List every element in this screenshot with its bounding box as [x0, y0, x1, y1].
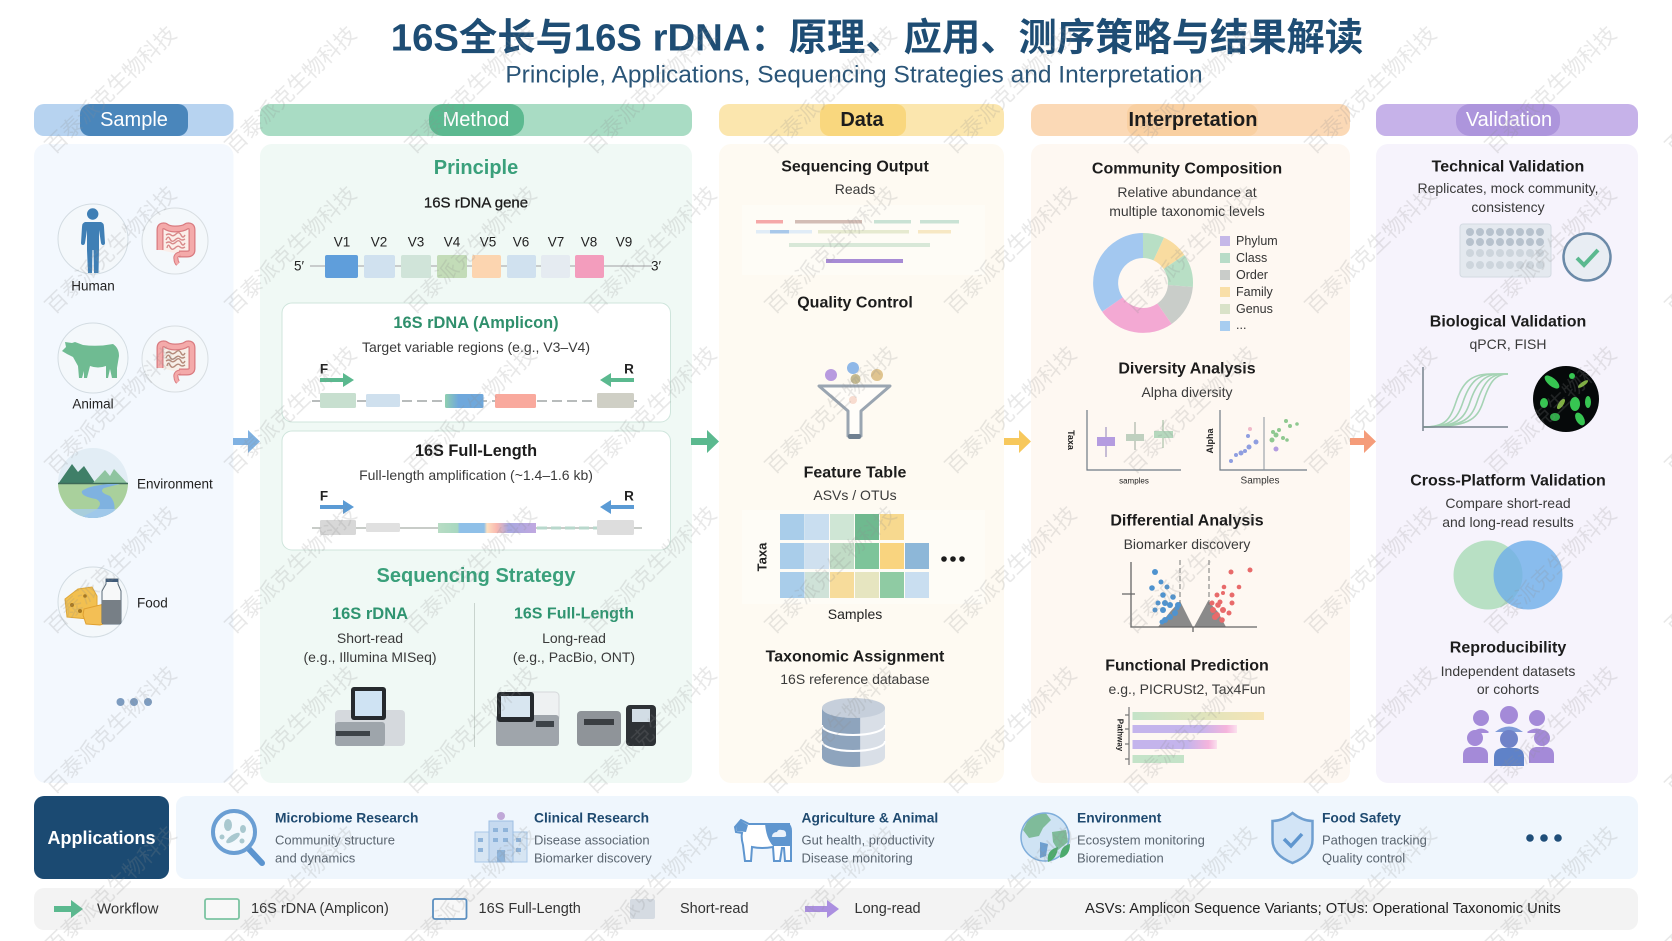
panel: Method: [260, 144, 692, 783]
text: clinical research: Disease association: [534, 832, 650, 848]
gene diagram: V2: [371, 234, 387, 250]
arrow: data to interpretation: [1003, 430, 1031, 453]
text: short-read strategy: [303, 605, 437, 665]
icon: cow: [735, 820, 791, 861]
bar chart: [1116, 707, 1264, 765]
gene diagram: 5′: [294, 258, 304, 274]
text: differential analysis: [1110, 512, 1264, 552]
watermark: 百泰派克生物科技: [1477, 498, 1623, 640]
legend: abbreviations: ASVs: Amplicon Sequence Variants; OTUs: Operational Taxonomic Units: [1085, 901, 1561, 917]
card: 16S rDNA amplicon: R: [624, 362, 634, 376]
header: Interpretation: Interpretation: [1129, 109, 1257, 131]
venn diagram: [1454, 540, 1562, 610]
text: sequencing output: Reads: [835, 181, 875, 197]
icon: animal: [58, 323, 128, 393]
watermark: 百泰派克生物科技: [1477, 18, 1623, 160]
heading: Sequencing Strategy: Sequencing Strategy: [377, 565, 576, 587]
heatmap: Taxa: [754, 542, 770, 571]
icon: funnel: [819, 362, 890, 439]
icon: human gut: [142, 208, 208, 274]
gene diagram: V4: [444, 234, 461, 250]
text: feature table: ASVs / OTUs: [813, 487, 897, 503]
label: Environment: Environment: [137, 476, 213, 492]
icon: people: [1463, 706, 1554, 766]
header: Data: [719, 104, 1004, 136]
donut chart: [1106, 246, 1181, 320]
header: Validation: [1376, 104, 1638, 136]
header: Sample: Sample: [100, 109, 168, 131]
watermark: 百泰派克生物科技: [217, 18, 363, 160]
watermark: 百泰派克生物科技: [397, 338, 543, 480]
legend: full-length: [433, 899, 581, 919]
icon: human: [58, 204, 128, 274]
watermark: 百泰派克生物科技: [1117, 658, 1263, 800]
text: long-read strategy: [513, 606, 635, 665]
card: 16S rDNA amplicon: [282, 303, 670, 422]
legend: amplicon: [205, 899, 389, 919]
donut legend: Family: [1236, 285, 1274, 299]
legend: [34, 888, 1638, 930]
more applications dots: [1526, 834, 1562, 842]
panel: Data: [719, 144, 1004, 783]
gene diagram: V5: [480, 234, 496, 250]
watermark: 百泰派克生物科技: [757, 498, 903, 640]
watermark: 百泰派克生物科技: [1297, 498, 1443, 640]
label: Food: Food: [137, 596, 168, 610]
gene diagram: V1: [334, 234, 350, 250]
icon: short-read sequencer: [335, 687, 405, 746]
watermark: 百泰派克生物科技: [1297, 18, 1443, 160]
arrow: method to data: [691, 430, 719, 453]
watermark: 百泰派克生物科技: [577, 658, 723, 800]
legend: short-read: [630, 899, 749, 919]
text: cross-platform validation: Cross-Platform Validation: [1410, 472, 1606, 490]
watermark: 百泰派克生物科技: [937, 498, 1083, 640]
watermark: 百泰派克生物科技: [397, 18, 543, 160]
text: microbiome research: Microbiome Research: [275, 810, 418, 826]
text: reproducibility: [1441, 640, 1575, 697]
text: community composition: Relative abundance at: [1117, 184, 1257, 200]
label: Animal: Animal: [72, 396, 114, 412]
text: technical validation: consistency: [1471, 199, 1545, 215]
watermark: 百泰派克生物科技: [37, 498, 183, 640]
header: Sample: [34, 104, 234, 136]
card: 16S full-length: F: [320, 488, 328, 504]
watermark: 百泰派克生物科技: [217, 178, 363, 320]
legend: amplicon: 16S rDNA (Amplicon): [251, 901, 389, 917]
watermark: 百泰派克生物科技: [37, 658, 183, 800]
watermark: 百泰派克生物科技: [1297, 658, 1443, 800]
text: food safety: Quality control: [1322, 850, 1405, 866]
text: functional prediction: Functional Prediction: [1105, 658, 1269, 674]
heatmap: [742, 510, 985, 622]
text: long-read strategy: 16S Full-Length: [514, 606, 634, 622]
text: long-read strategy: Long-read: [542, 630, 606, 646]
divider: [474, 603, 476, 747]
text: functional prediction: [1105, 658, 1269, 697]
watermark: 百泰派克生物科技: [577, 338, 723, 480]
scatter plot: Alpha: [1205, 428, 1215, 454]
legend: long-read: [805, 900, 921, 918]
text: short-read strategy: 16S rDNA: [332, 605, 408, 623]
text: biological validation: qPCR, FISH: [1469, 336, 1547, 352]
watermark: 百泰派克生物科技: [757, 658, 903, 800]
text: environment: [1077, 810, 1205, 866]
text: community composition: multiple taxonomic levels: [1109, 203, 1265, 219]
watermark: 百泰派克生物科技: [37, 18, 183, 160]
watermark: 百泰派克生物科技: [757, 18, 903, 160]
header: Interpretation: [1031, 104, 1350, 136]
icon: database: [822, 698, 885, 767]
applications label: [34, 796, 169, 879]
header: Method: [260, 104, 692, 136]
watermark: 百泰派克生物科技: [1477, 178, 1623, 320]
text: differential analysis: Differential Analysis: [1110, 512, 1264, 530]
watermark: 百泰派克生物科技: [397, 658, 543, 800]
watermark: 百泰派克生物科技: [1297, 338, 1443, 480]
text: sequencing output: Sequencing Output: [781, 158, 929, 176]
panel: Validation: [1376, 144, 1638, 783]
header: Data: Data: [840, 109, 885, 131]
scatter plot: [1205, 410, 1307, 486]
header: Validation: Validation: [1466, 109, 1552, 131]
icon: food: [58, 567, 128, 637]
heading: Principle: Principle: [434, 157, 518, 179]
text: reproducibility: or cohorts: [1477, 681, 1539, 697]
text: technical validation: [1417, 158, 1599, 215]
legend: long-read: Long-read: [854, 901, 921, 917]
watermark: 百泰派克生物科技: [1117, 338, 1263, 480]
watermark: 百泰派克生物科技: [1477, 338, 1623, 480]
gene diagram: V9: [616, 234, 632, 250]
text: food safety: [1322, 810, 1427, 866]
arrow: sample to method: [233, 430, 260, 453]
gene diagram: V3: [408, 234, 424, 250]
text: feature table: Feature Table: [804, 464, 907, 482]
icon: long-read sequencers: [496, 692, 656, 746]
watermark: 百泰派克生物科技: [937, 338, 1083, 480]
icon: animal gut: [142, 326, 208, 392]
watermark: 百泰派克生物科技: [1477, 658, 1623, 800]
watermark: 百泰派克生物科技: [217, 658, 363, 800]
icon: environment: [58, 448, 128, 518]
watermark: 百泰派克生物科技: [757, 338, 903, 480]
text: taxonomic assignment: 16S reference database: [780, 671, 930, 687]
text: cross-platform validation: and long-read results: [1442, 514, 1574, 530]
donut legend: Order: [1236, 268, 1268, 282]
watermark: 百泰派克生物科技: [577, 18, 723, 160]
reads diagram: [742, 205, 985, 275]
watermark: 百泰派克生物科技: [217, 498, 363, 640]
icon: shield: [1272, 813, 1312, 863]
card: 16S full-length: 16S Full-Length: [415, 442, 537, 460]
text: cross-platform validation: Compare short-read: [1445, 495, 1571, 511]
icon: globe: [1021, 812, 1070, 862]
card: 16S full-length: [282, 431, 670, 550]
watermark: 百泰派克生物科技: [1117, 178, 1263, 320]
text: microbiome research: and dynamics: [275, 850, 356, 866]
box plot: Taxa: [1066, 430, 1076, 451]
text: food safety: Pathogen tracking: [1322, 832, 1427, 848]
text: community composition: [1092, 160, 1282, 219]
text: cross-platform validation: [1410, 472, 1606, 530]
text: community composition: Community Composition: [1092, 160, 1282, 178]
text: taxonomic assignment: [766, 648, 945, 687]
donut legend: [1220, 234, 1278, 332]
more samples dots: [116, 698, 152, 706]
text: clinical research: Biomarker discovery: [534, 850, 652, 866]
watermark: 百泰派克生物科技: [937, 658, 1083, 800]
watermark: 百泰派克生物科技: [37, 338, 183, 480]
text: feature table: [804, 464, 907, 503]
text: biological validation: [1430, 314, 1586, 352]
text: biological validation: Biological Validation: [1430, 314, 1586, 330]
legend: workflow: Workflow: [97, 900, 159, 918]
text: taxonomic assignment: Taxonomic Assignment: [766, 648, 945, 666]
text: food safety: Food Safety: [1322, 810, 1401, 826]
watermark: 百泰派克生物科技: [1117, 18, 1263, 160]
box plot: [1066, 410, 1181, 486]
panel: Sample: [34, 144, 234, 783]
text: microbiome research: [275, 810, 418, 866]
text: agriculture: Disease monitoring: [802, 850, 913, 866]
text: reproducibility: Reproducibility: [1450, 640, 1566, 656]
text: reproducibility: Independent datasets: [1441, 663, 1575, 679]
panel: applications: [176, 796, 1638, 879]
text: short-read strategy: (e.g., Illumina MISeq): [303, 649, 437, 665]
text: diversity analysis: Diversity Analysis: [1118, 360, 1256, 378]
icon: magnifier: [213, 811, 262, 863]
text: environment: Bioremediation: [1077, 850, 1164, 866]
card: 16S rDNA amplicon: Target variable regions (e.g., V3–V4): [362, 339, 590, 355]
legend: full-length: 16S Full-Length: [478, 901, 581, 917]
text: technical validation: Replicates, mock community,: [1417, 180, 1599, 196]
watermark: 百泰派克生物科技: [397, 178, 543, 320]
donut legend: Genus: [1236, 302, 1273, 316]
header: Method: Method: [443, 109, 509, 131]
text: long-read strategy: (e.g., PacBio, ONT): [513, 649, 635, 665]
text: technical validation: Technical Validation: [1432, 158, 1584, 176]
watermark: 百泰派克生物科技: [1297, 178, 1443, 320]
watermark: 百泰派克生物科技: [937, 18, 1083, 160]
label: 16S rDNA gene: 16S rDNA gene: [424, 194, 528, 212]
qPCR curves: [1423, 367, 1508, 431]
icon: hospital: [475, 812, 527, 862]
applications label: Applications: [47, 828, 156, 848]
subtitle: Principle, Applications, Sequencing Strategies and Interpretation: [505, 62, 1203, 88]
volcano plot: [1122, 560, 1257, 632]
text: differential analysis: Biomarker discovery: [1124, 536, 1250, 552]
watermark: 百泰派克生物科技: [577, 178, 723, 320]
card: 16S full-length: Full-length amplification (~1.4–1.6 kb): [359, 467, 593, 483]
card: 16S rDNA amplicon: 16S rDNA (Amplicon): [393, 314, 559, 332]
text: agriculture: Gut health, productivity: [802, 832, 935, 848]
legend: workflow: [54, 900, 159, 918]
heatmap: Samples: [828, 606, 882, 622]
gene diagram: [294, 234, 661, 278]
scatter plot: Samples: [1241, 476, 1279, 486]
watermark: 百泰派克生物科技: [757, 178, 903, 320]
gene diagram: V6: [513, 234, 529, 250]
icon: check: [1564, 234, 1610, 280]
gene diagram: 3′: [651, 258, 661, 274]
text: short-read strategy: Short-read: [337, 630, 403, 646]
watermark: 百泰派克生物科技: [577, 498, 723, 640]
bar chart: Pathway: [1116, 719, 1124, 752]
text: agriculture: Agriculture & Animal: [802, 810, 938, 826]
text: agriculture: [802, 810, 938, 866]
watermark: 百泰派克生物科技: [37, 178, 183, 320]
text: sequencing output: [781, 158, 929, 197]
text: diversity analysis: [1118, 360, 1256, 400]
icon: well plate: [1460, 224, 1551, 277]
arrow: interpretation to validation: [1348, 430, 1376, 453]
watermark: 百泰派克生物科技: [397, 498, 543, 640]
text: clinical research: [534, 810, 652, 866]
label: Human: Human: [71, 278, 115, 294]
text: diversity analysis: Alpha diversity: [1141, 384, 1233, 400]
donut legend: Phylum: [1236, 234, 1278, 248]
donut legend: ...: [1236, 318, 1246, 332]
watermark: 百泰派克生物科技: [937, 178, 1083, 320]
text: clinical research: Clinical Research: [534, 810, 649, 826]
card: 16S rDNA amplicon: F: [320, 362, 328, 376]
text: environment: Ecosystem monitoring: [1077, 832, 1205, 848]
text: quality control: Quality Control: [797, 294, 913, 312]
FISH image: [1533, 366, 1599, 432]
text: functional prediction: e.g., PICRUSt2, Tax4Fun: [1109, 681, 1265, 697]
title: 16S全长与16S rDNA：原理、应用、测序策略与结果解读: [391, 16, 1363, 60]
watermark: 百泰派克生物科技: [217, 338, 363, 480]
donut legend: Class: [1236, 251, 1267, 265]
text: microbiome research: Community structure: [275, 832, 395, 848]
legend: short-read: Short-read: [680, 901, 749, 917]
panel: Interpretation: [1031, 144, 1350, 783]
text: environment: Environment: [1077, 810, 1162, 826]
gene diagram: V7: [548, 234, 564, 250]
box plot: samples: [1119, 476, 1149, 486]
watermark: 百泰派克生物科技: [1117, 498, 1263, 640]
card: 16S full-length: R: [624, 488, 634, 504]
gene diagram: V8: [581, 234, 597, 250]
